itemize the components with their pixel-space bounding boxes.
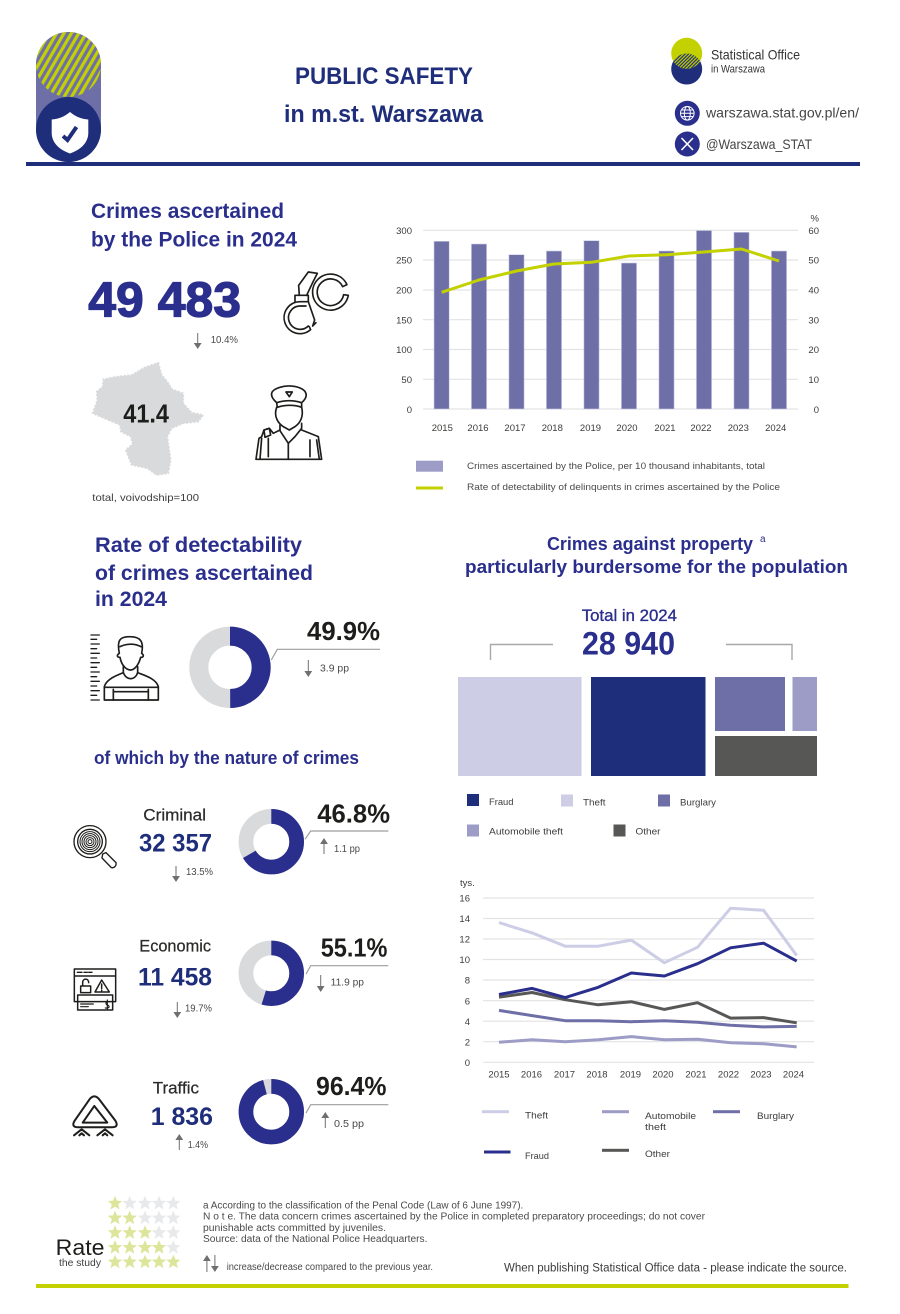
line chart grid and axes: 2021 (685, 1070, 707, 1081)
chart grid and axes: 2020 (616, 423, 638, 434)
stat: criminal (139, 806, 213, 882)
heading: rate of detectability (95, 534, 313, 611)
stat: traffic: 1.4% (188, 1140, 208, 1151)
stat: criminal: 13.5% (186, 867, 213, 878)
stat: criminal: 32 357 (139, 830, 212, 858)
total crimes number: 49 483 (88, 274, 241, 328)
stat: economic: Economic (139, 937, 211, 956)
line chart grid and axes: 2022 (718, 1070, 739, 1081)
logo: Statistical Office in Warsaw: in Warszawa (711, 64, 766, 76)
line chart grid and axes: 0 (465, 1058, 470, 1069)
line chart grid and axes (459, 878, 814, 1081)
footnotes: punishable acts committed by juveniles. (203, 1223, 386, 1234)
callout: 96.4%: 96.4% (316, 1071, 386, 1101)
icon: handcuffs (284, 272, 348, 334)
treemap legend: Other (636, 826, 660, 838)
series: other (499, 992, 797, 1023)
stat: traffic: 1 836 (151, 1103, 213, 1131)
line chart grid and axes: 14 (459, 914, 470, 925)
heading: crimes ascertained: by the Police in 2024 (91, 229, 297, 252)
header emblem (36, 32, 101, 162)
map caption: total, voivodship=100 (92, 492, 199, 504)
line chart grid and axes: 2 (465, 1037, 470, 1048)
callout: 96.4% (306, 1071, 388, 1130)
line chart legend: theft (645, 1122, 666, 1133)
total crimes number: 10.4% (211, 335, 238, 346)
callout: 96.4%: 0.5 pp (334, 1119, 364, 1130)
rating: rate the study (56, 1196, 181, 1269)
heading: crimes against property (465, 533, 848, 577)
donut: economic (246, 948, 297, 999)
chart grid and axes: 20 (808, 345, 819, 356)
icon: suspect with height ruler (91, 635, 158, 700)
heading: crimes against property: Crimes against property (547, 533, 754, 554)
chart grid and axes: 2017 (504, 423, 526, 434)
chart grid and axes: 40 (808, 286, 819, 297)
chart grid and axes: 10 (808, 375, 819, 386)
line chart grid and axes: 2019 (620, 1070, 641, 1081)
callout: 55.1%: 11.9 pp (331, 978, 364, 989)
callout: 55.1% (306, 933, 388, 992)
chart legend: Crimes ascertained by the Police, per 10 thousand inhabitants, total (467, 461, 765, 472)
line chart legend: Automobile (645, 1111, 696, 1122)
chart grid and axes: 2018 (542, 423, 563, 434)
line chart grid and axes: 2016 (521, 1070, 542, 1081)
footnotes: N o t e. The data concern crimes ascertained by the Police in completed preparatory proceedings; do not cover (203, 1212, 706, 1223)
website link: warszawa.stat.gov.pl/en/ (705, 105, 859, 121)
chart grid and axes: 150 (396, 315, 412, 326)
chart grid and axes: 30 (808, 315, 819, 326)
chart grid and axes: 0 (407, 405, 412, 416)
stat: criminal: Criminal (143, 806, 206, 825)
footnotes: Source: data of the National Police Headquarters. (203, 1234, 428, 1245)
callout: 46.8%: 1.1 pp (334, 844, 360, 855)
total in 2024: Total in 2024 (582, 606, 677, 625)
donut: criminal (246, 816, 297, 867)
chart grid and axes: 2019 (580, 423, 601, 434)
heading: crimes ascertained: Crimes ascertained (91, 200, 284, 223)
donut: traffic (246, 1086, 297, 1137)
rating: rate the study: Rate (56, 1235, 104, 1260)
line chart grid and axes: 4 (465, 1017, 470, 1028)
callout: 46.8% (305, 799, 390, 855)
line chart grid and axes: 2017 (554, 1070, 575, 1081)
line chart legend (482, 1110, 794, 1162)
icon: economic crime (74, 969, 116, 1010)
logo: Statistical Office in Warsaw (671, 38, 800, 84)
chart grid and axes: 2021 (654, 423, 676, 434)
treemap (458, 677, 817, 776)
chart grid and axes (396, 214, 820, 434)
callout: 49.9%: 49.9% (307, 616, 380, 646)
line chart grid and axes: 2024 (783, 1070, 804, 1081)
map: voivodship index (93, 363, 203, 475)
series: theft (499, 908, 797, 963)
callout: 55.1%: 55.1% (321, 933, 388, 963)
chart grid and axes: % (811, 214, 820, 225)
line chart grid and axes: 2023 (750, 1070, 772, 1081)
heading: crimes against property: a (760, 534, 766, 545)
title (284, 63, 484, 128)
chart grid and axes: 50 (808, 256, 819, 267)
title: in m.st. Warszawa (284, 101, 484, 128)
treemap legend: Theft (583, 798, 606, 808)
stat: economic: 19.7% (185, 1004, 212, 1015)
bar and line chart (396, 214, 820, 434)
stat: traffic: Traffic (153, 1078, 199, 1097)
chart legend (416, 461, 780, 493)
chart grid and axes: 2023 (728, 423, 749, 434)
star rows (108, 1196, 180, 1268)
footnotes: a According to the classification of the Penal Code (Law of 6 June 1997). (203, 1200, 523, 1211)
icon: warning triangle (73, 1096, 117, 1135)
treemap legend: Burglary (680, 798, 716, 808)
X account (675, 132, 812, 156)
chart grid and axes: 0 (814, 405, 819, 416)
callout: 46.8%: 46.8% (317, 799, 390, 829)
chart grid and axes: 2024 (765, 423, 786, 434)
treemap legend: Automobile theft (489, 826, 563, 838)
chart grid and axes: 2022 (690, 423, 712, 434)
footnotes (203, 1200, 706, 1245)
chart grid and axes: 2015 (432, 423, 453, 434)
heading: rate of detectability: Rate of detectability (95, 534, 302, 557)
line chart legend: Burglary (757, 1111, 794, 1122)
line chart legend: Other (645, 1149, 670, 1160)
website link (675, 101, 859, 126)
line chart grid and axes: 16 (459, 894, 470, 905)
treemap legend: Fraud (489, 797, 514, 808)
heading: of which by nature: of which by the nature of crimes (94, 747, 359, 768)
total in 2024 (490, 606, 792, 661)
callout: 49.9% (271, 616, 380, 677)
line chart grid and axes: 10 (459, 955, 470, 966)
line chart grid and axes: 2015 (488, 1070, 510, 1081)
line chart (459, 878, 814, 1081)
line: rate of detectability (442, 249, 779, 292)
chart grid and axes: 60 (808, 226, 819, 237)
chart legend: Rate of detectability of delinquents in crimes ascertained by the Police (467, 482, 780, 493)
series: automobile theft (499, 1037, 797, 1047)
line chart grid and axes: 2018 (586, 1070, 608, 1081)
title: PUBLIC SAFETY (295, 63, 473, 90)
callout: 49.9%: 3.9 pp (320, 664, 349, 675)
treemap legend (467, 794, 716, 838)
icon: police officer (256, 386, 322, 459)
icon: fingerprint magnifier (74, 826, 116, 868)
rating: rate the study: the study (59, 1258, 101, 1269)
line chart legend: Theft (525, 1111, 548, 1122)
chart grid and axes: 2016 (467, 423, 489, 434)
line chart legend: Fraud (525, 1151, 549, 1162)
X account: @Warszawa_STAT (706, 136, 812, 152)
line chart grid and axes: 12 (459, 935, 470, 946)
arrows legend: increase/decrease compared to the previous year. (227, 1262, 433, 1273)
logo: Statistical Office in Warsaw: Statistical Office (711, 46, 800, 62)
chart grid and axes: 100 (396, 345, 412, 356)
series: fraud (499, 943, 797, 998)
chart grid and axes: 250 (396, 256, 412, 267)
chart grid and axes: 50 (401, 375, 412, 386)
line chart grid and axes: 2020 (652, 1070, 674, 1081)
heading: crimes against property: particularly burdersome for the population (465, 556, 848, 577)
stat: economic (138, 937, 212, 1018)
heading: rate of detectability: in 2024 (95, 588, 167, 611)
series: burglary (499, 1010, 797, 1027)
line chart grid and axes: 6 (465, 996, 470, 1007)
bars: crimes per 10 thousand (434, 230, 787, 409)
chart grid and axes: 200 (396, 286, 412, 297)
line chart grid and axes: tys. (460, 878, 475, 889)
stat: traffic (151, 1078, 213, 1151)
line chart grid and axes: 8 (465, 976, 470, 987)
heading: rate of detectability: of crimes ascertained (95, 562, 313, 585)
chart grid and axes: 300 (396, 226, 412, 237)
heading: crimes ascertained (91, 200, 297, 252)
stat: economic: 11 458 (138, 964, 212, 992)
publishing note: When publishing Statistical Office data - please indicate the source. (504, 1263, 847, 1275)
map: voivodship index: 41.4 (123, 398, 169, 428)
total in 2024: 28 940 (582, 625, 675, 661)
arrows legend (203, 1255, 433, 1273)
donut: overall detectability 49.9% (199, 636, 261, 698)
